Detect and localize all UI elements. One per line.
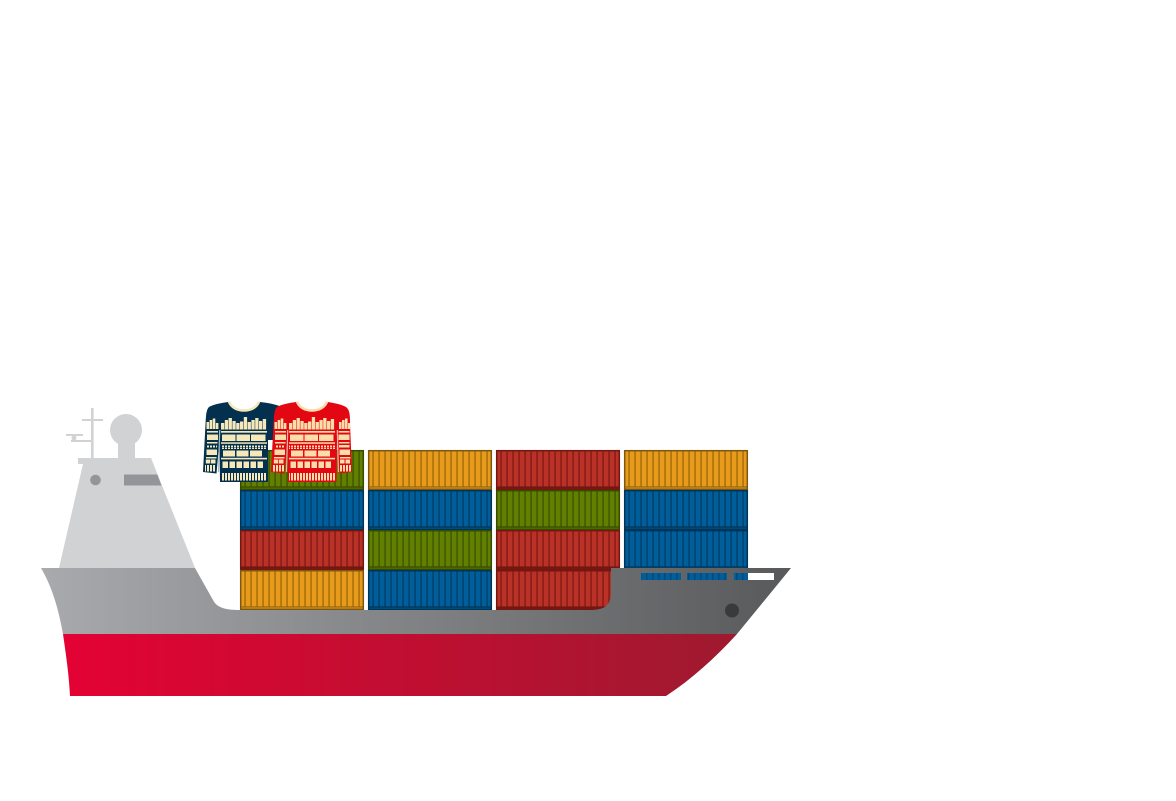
bridge window — [124, 474, 162, 486]
green container — [496, 490, 620, 530]
green container — [240, 450, 364, 490]
red container — [240, 530, 364, 570]
orange container — [240, 570, 364, 610]
ship hull: red lower — [63, 634, 737, 696]
sweater: red — [271, 402, 352, 482]
blue container — [368, 570, 492, 610]
sweater: navy — [203, 402, 284, 482]
orange container — [624, 450, 748, 490]
bow windows — [641, 573, 774, 580]
bow anchor hole — [725, 604, 739, 618]
orange container — [368, 450, 492, 490]
blue container — [240, 490, 364, 530]
ship hull: grey upper — [41, 568, 791, 634]
blue container — [624, 530, 748, 570]
green container — [368, 530, 492, 570]
red container — [496, 570, 620, 610]
ship superstructure — [59, 408, 195, 568]
blue container — [624, 490, 748, 530]
container column 4 — [624, 450, 748, 570]
blue container — [368, 490, 492, 530]
container column 3 — [496, 450, 620, 610]
right sleeve knit — [338, 418, 351, 472]
porthole — [90, 475, 101, 485]
containers — [240, 450, 748, 610]
container column 2 — [368, 450, 492, 610]
container column 1 — [240, 450, 364, 610]
red container — [496, 450, 620, 490]
red container — [496, 530, 620, 570]
